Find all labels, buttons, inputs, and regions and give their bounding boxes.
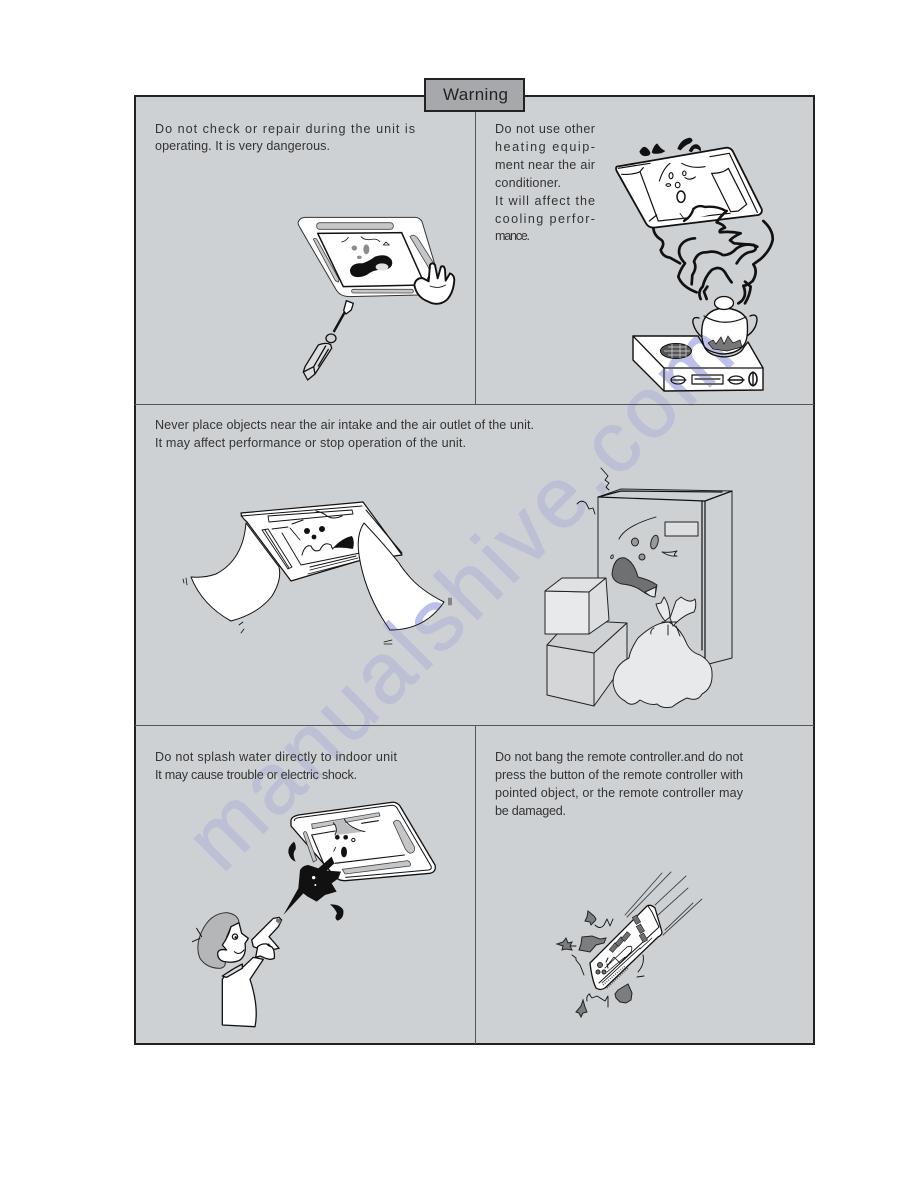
illustration: cassette unit covered by paper	[183, 502, 451, 644]
text: do not splash water: It may cause trouble or electric shock.	[155, 768, 357, 782]
text: do not check or repair: operating. It is very dangerous.	[155, 139, 330, 153]
text: do not bang the remote: press the button of the remote controller with	[495, 768, 743, 782]
text: do not use other heating: mance.	[495, 229, 530, 243]
text: do not use other heating: heating equip-	[495, 140, 595, 154]
heading: Warning	[425, 79, 524, 111]
text: do not check or repair	[155, 122, 415, 153]
text: never place objects: It may affect performance or stop operation of the unit.	[155, 436, 466, 450]
text: do not use other heating: Do not use other	[495, 122, 595, 136]
right paper flap	[358, 523, 444, 630]
text: do not splash water: Do not splash water directly to indoor unit	[155, 750, 398, 764]
lower box	[547, 620, 627, 706]
speed lines	[625, 872, 702, 935]
sweat drops	[639, 138, 701, 156]
cassette face panel	[318, 233, 425, 287]
illustration: cassette unit above kettle on stove with smoke	[616, 138, 773, 391]
kettle	[693, 296, 757, 354]
left paper flap	[191, 523, 280, 621]
cassette	[291, 802, 435, 881]
cassette	[616, 148, 762, 228]
cassette slots	[303, 813, 415, 874]
illustration: person spraying water at cassette	[192, 802, 435, 1027]
heading: Warning: Warning	[443, 85, 508, 104]
flutter marks	[183, 578, 451, 644]
text: never place objects: Never place objects near the air intake and the air outlet of the unit.	[155, 418, 534, 432]
cassette worried face	[659, 163, 705, 220]
cassette and smoke	[616, 138, 773, 303]
face	[218, 923, 248, 962]
illustration: falling remote controller	[557, 872, 702, 1017]
person	[192, 913, 282, 1027]
floor-standing unit	[598, 489, 732, 665]
text: do not use other heating: cooling perfor-	[495, 212, 595, 226]
cassette inner frame	[312, 821, 404, 867]
stop hand	[414, 263, 454, 304]
cassette face	[333, 819, 365, 857]
cassette body	[298, 217, 435, 297]
cassette	[241, 502, 402, 581]
text: do not use other heating	[495, 122, 595, 243]
illustration: cassette unit with hand and screwdriver	[298, 217, 454, 380]
unit panel	[665, 522, 698, 536]
text: do not bang the remote: Do not bang the remote controller.and do not	[495, 750, 744, 764]
text: do not use other heating: conditioner.	[495, 176, 561, 190]
hair	[198, 913, 239, 968]
upper box	[545, 578, 609, 634]
text: do not bang the remote: be damaged.	[495, 804, 566, 818]
worried face	[342, 237, 392, 277]
text: do not bang the remote: pointed object, or the remote controller may	[495, 786, 744, 800]
cassette slots	[313, 223, 433, 293]
text: do not check or repair: Do not check or repair during the unit is	[155, 122, 415, 136]
water splash	[283, 842, 343, 921]
watermark: manualshive.com	[168, 302, 754, 888]
collar	[222, 964, 242, 977]
illustration: air conditioner blocked by boxes and bag	[545, 468, 732, 708]
screwdriver	[303, 301, 353, 380]
smoke	[653, 211, 773, 303]
text: do not bang the remote	[495, 750, 744, 818]
water gun	[252, 917, 282, 949]
remote buttons and details	[596, 915, 652, 988]
crumpled impact marks	[557, 911, 632, 1017]
hand	[256, 944, 274, 959]
wind marks	[577, 468, 609, 514]
panel: warning sheet	[135, 96, 814, 1044]
text: do not use other heating: ment near the air	[495, 158, 595, 172]
wavy mouth	[684, 206, 726, 221]
text: never place objects	[155, 418, 534, 450]
garbage bag	[613, 597, 712, 708]
text: do not splash water	[155, 750, 398, 782]
unit face	[611, 517, 677, 597]
remote body	[590, 905, 662, 990]
text: do not use other heating: It will affect the	[495, 194, 595, 208]
worried face	[292, 511, 354, 555]
stove	[633, 336, 763, 391]
body	[222, 957, 263, 1027]
